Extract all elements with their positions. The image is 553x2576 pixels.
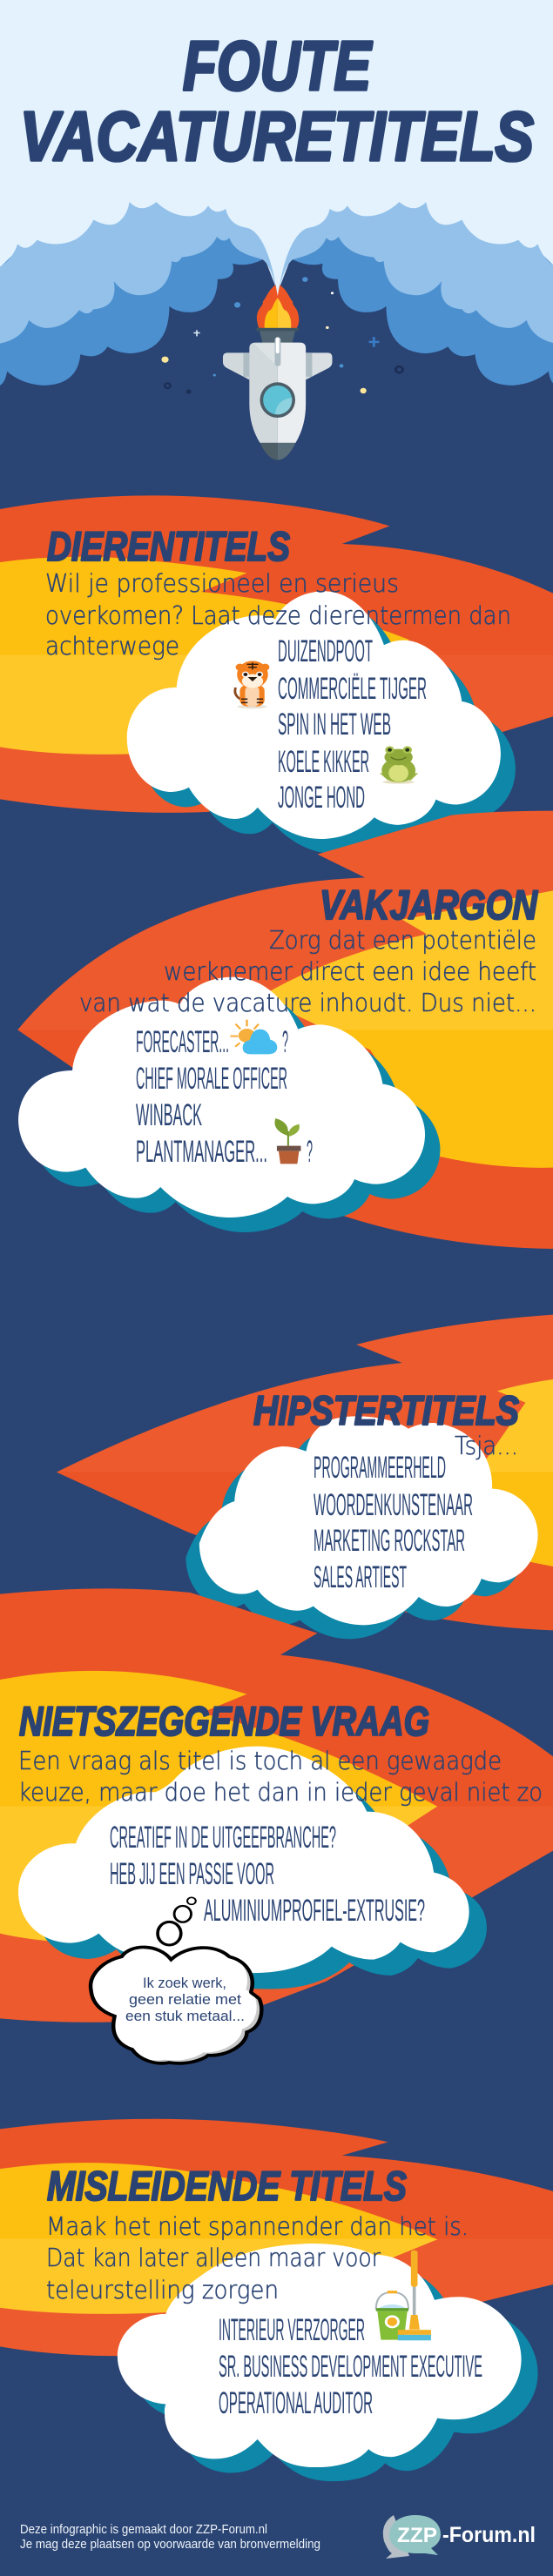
- icon: frog: [380, 746, 418, 784]
- icon: speech bubbles: [383, 2515, 441, 2559]
- list: KOELE KIKKER: [278, 745, 369, 779]
- intro text: Een vraag als titel is toch al een gewaagde: [18, 1747, 502, 1775]
- intro text: Wil je professioneel en serieus: [45, 569, 399, 598]
- header illustration: sky, clouds and rocket: [0, 0, 553, 460]
- intro text: [18, 1747, 543, 1807]
- intro text: teleurstelling zorgen: [46, 2276, 279, 2304]
- cloud shadow: [185, 1430, 524, 1639]
- heading: DIERENTITELS: [47, 523, 290, 569]
- intro text: Tsja...: [455, 1432, 518, 1460]
- title: [20, 27, 534, 175]
- flame bands: [0, 1588, 553, 2023]
- footer note: [20, 2523, 320, 2552]
- smoke clouds: [0, 202, 553, 386]
- panel: misleidende titels: [0, 2119, 553, 2481]
- rocket: [223, 284, 333, 460]
- list: [136, 1025, 313, 1169]
- title: FOUTE: [183, 27, 373, 104]
- panel: vakjargon: ?: [307, 1135, 313, 1169]
- heading: NIETSZEGGENDE VRAAG: [19, 1698, 429, 1744]
- list: [278, 634, 427, 815]
- thought text: geen relatie met: [129, 1991, 241, 2008]
- cloud: [18, 1747, 469, 1973]
- list: HEB JIJ EEN PASSIE VOOR: [110, 1857, 274, 1891]
- list: SPIN IN HET WEB: [278, 708, 391, 741]
- intro text: [45, 569, 511, 661]
- panel: hipstertitels: [57, 1315, 553, 1639]
- thought text: Ik zoek werk,: [143, 1975, 226, 1991]
- intro text: [79, 926, 536, 1017]
- footer note: Deze infographic is gemaakt door ZZP-Forum.nl: [20, 2523, 267, 2537]
- intro text: Dat kan later alleen maar voor: [46, 2244, 381, 2272]
- intro text: Maak het niet spannender dan het is.: [46, 2212, 469, 2241]
- list: ?: [282, 1025, 288, 1059]
- list: [314, 1451, 473, 1594]
- list: [110, 1821, 425, 1928]
- list: WINBACK: [136, 1098, 202, 1132]
- list: DUIZENDPOOT: [278, 634, 373, 668]
- flame bands: [17, 811, 553, 1249]
- intro text: [46, 2212, 469, 2304]
- logo: ZZP-Forum.nl: -Forum.nl: [442, 2523, 536, 2547]
- list: JONGE HOND: [278, 781, 365, 815]
- icon: plant: [274, 1118, 300, 1164]
- icon: sun and cloud: [230, 1020, 277, 1054]
- flame bands: [57, 1315, 553, 1630]
- sky: [0, 0, 553, 289]
- cloud shadow: [36, 1762, 487, 1989]
- flame bands: [0, 495, 553, 813]
- flame bands: [0, 2119, 553, 2356]
- porthole: [260, 382, 295, 418]
- icon: bucket and mop: [376, 2251, 431, 2340]
- intro text: overkomen? Laat deze dierentermen dan: [45, 601, 511, 630]
- cloud shadow: [33, 992, 440, 1232]
- cloud shadow: [142, 607, 516, 854]
- flame: [257, 284, 299, 329]
- cloud shadow: [134, 2257, 538, 2481]
- list: SALES ARTIEST: [314, 1560, 407, 1594]
- intro text: achterwege: [45, 632, 179, 661]
- thought text: [125, 1975, 245, 2024]
- footer note: Je mag deze plaatsen op voorwaarde van bronvermelding: [20, 2538, 320, 2552]
- panel: nietszeggende vraag: [0, 1588, 553, 2063]
- list: FORECASTER...: [136, 1025, 229, 1059]
- cloud: [127, 591, 501, 839]
- icon: tiger: [235, 661, 269, 708]
- logo: ZZP-Forum.nl: ZZP: [397, 2524, 437, 2547]
- list: [219, 2313, 482, 2420]
- cloud: [118, 2244, 522, 2467]
- cloud: [199, 1416, 538, 1625]
- logo: ZZP-Forum.nl: [383, 2515, 536, 2559]
- list: PLANTMANAGER...: [136, 1135, 267, 1169]
- thought text: een stuk metaal...: [125, 2008, 245, 2024]
- panel: vakjargon: [17, 811, 553, 1249]
- cloud: [18, 977, 425, 1218]
- heading: MISLEIDENDE TITELS: [47, 2163, 407, 2209]
- thought bubble: [85, 1897, 261, 2063]
- stars: [161, 277, 403, 393]
- panel: vakjargon: CHIEF MORALE OFFICER: [136, 1062, 287, 1096]
- panel: dierentitels: [0, 495, 553, 854]
